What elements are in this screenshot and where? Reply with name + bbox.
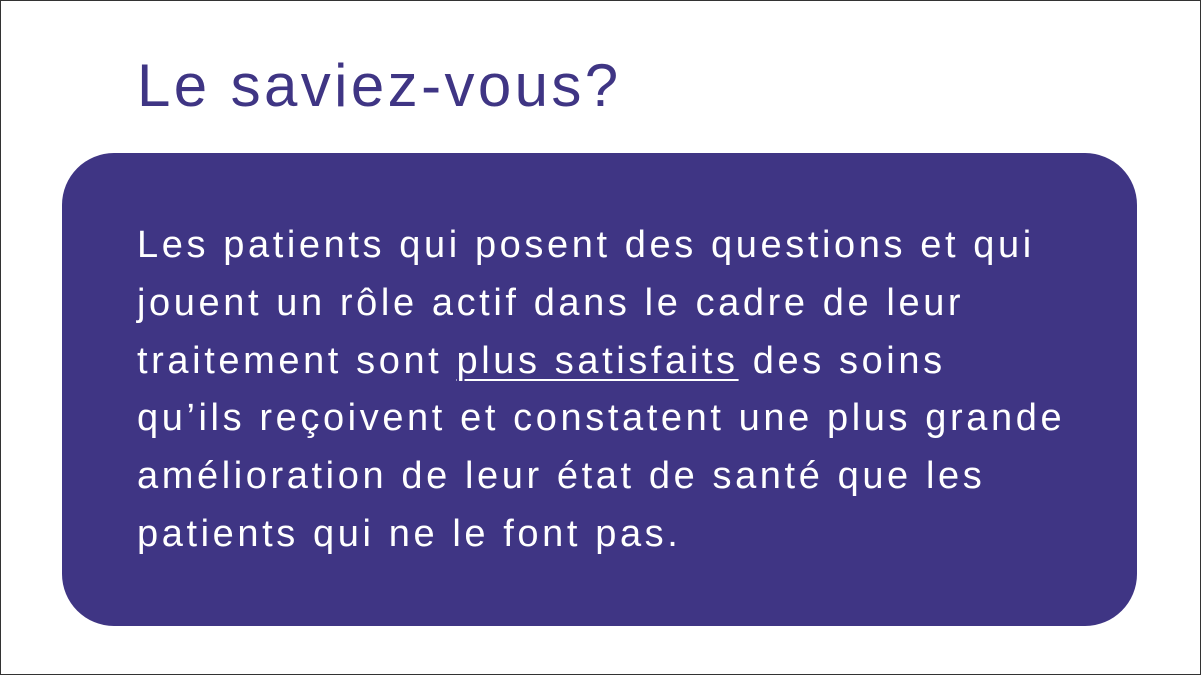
text block: fact [136,224,1065,555]
text block: fact: qu’ils reçoivent et constatent une plus grande [137,397,1065,439]
text block: fact: patients qui ne le font pas. [137,513,681,555]
text block: fact: traitement sont plus satisfaits des soins [137,340,946,382]
panel: fact box [62,153,1137,626]
title: Le saviez-vous? [137,52,622,119]
text block: fact: Les patients qui posent des questions et qui [137,224,1035,266]
text block: fact: jouent un rôle actif dans le cadre de leur [137,282,964,324]
text block: fact: amélioration de leur état de santé que les [137,455,985,497]
